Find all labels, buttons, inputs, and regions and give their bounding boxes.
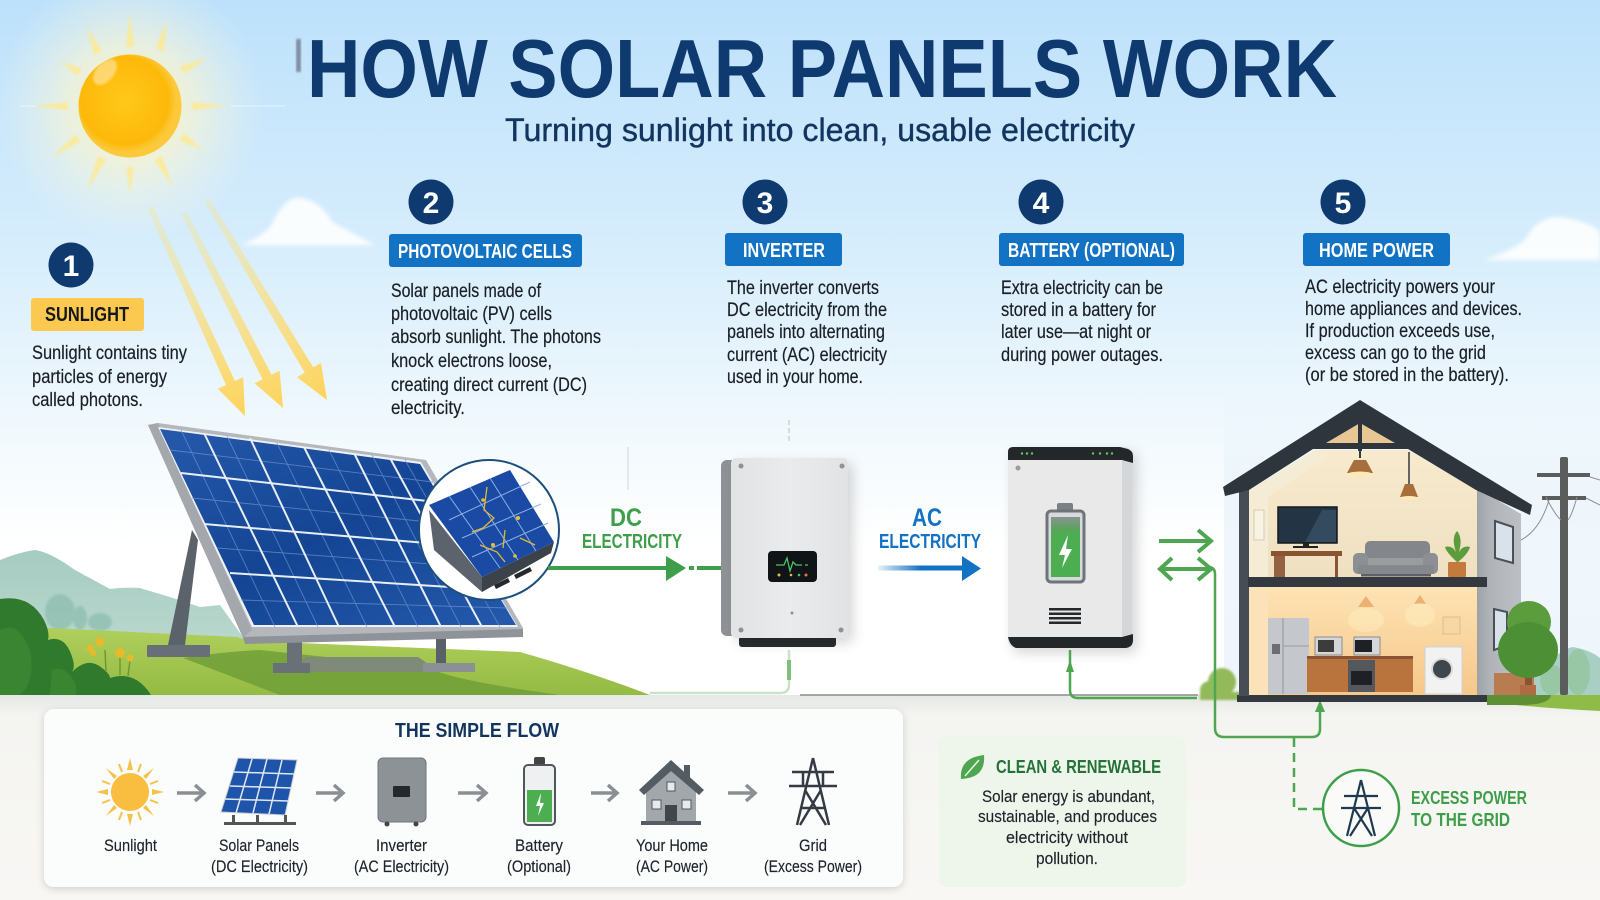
- step 2: photovoltaic cells: photovoltaic (PV) cells: [391, 304, 552, 325]
- TV: [1278, 507, 1337, 548]
- AC electricity label: ELECTRICITY: [879, 531, 982, 553]
- callout: clean and renewable: CLEAN & RENEWABLE: [996, 757, 1161, 777]
- step 3: inverter: The inverter converts: [727, 278, 879, 299]
- bush beside house: [1200, 668, 1240, 700]
- step 3: inverter: DC electricity from the: [727, 300, 887, 321]
- flow labels: (Optional): [507, 857, 571, 876]
- AC arrow: [878, 556, 981, 581]
- icon: grid tower: [1341, 780, 1381, 836]
- step 5: home power: home appliances and devices.: [1305, 299, 1522, 320]
- step 3: inverter: current (AC) electricity: [727, 345, 887, 366]
- flow arrow: [728, 785, 755, 801]
- flow labels: Solar Panels: [219, 836, 299, 855]
- step 1: sunlight: particles of energy: [32, 367, 167, 388]
- background sky: [0, 0, 1600, 700]
- step 2: photovoltaic cells: creating direct current (DC): [391, 375, 587, 396]
- panel: the simple flow: [44, 709, 903, 887]
- pendant lamps upper: [1347, 450, 1418, 500]
- step 5: home power: If production exceeds use,: [1305, 321, 1495, 342]
- AC electricity label: [879, 504, 982, 553]
- step 3: inverter: 3: [757, 187, 773, 220]
- step 2: photovoltaic cells: electricity.: [391, 398, 465, 419]
- magnified PV cell: [419, 460, 559, 600]
- ground line: [800, 694, 1198, 696]
- step 5: home power: AC electricity powers your: [1305, 277, 1496, 298]
- flow arrow: [177, 785, 204, 801]
- inverter unit: [628, 420, 848, 647]
- step 4: battery: during power outages.: [1001, 345, 1163, 366]
- step 4: battery: BATTERY (OPTIONAL): [1008, 240, 1175, 262]
- console table: [1271, 551, 1342, 577]
- flow labels: (AC Electricity): [354, 857, 449, 876]
- step 5: home power: excess can go to the grid: [1305, 343, 1486, 364]
- step 3: inverter: INVERTER: [743, 240, 825, 262]
- callout: clean and renewable: [939, 737, 1186, 887]
- DC electricity label: ELECTRICITY: [582, 531, 682, 553]
- flow labels: Inverter: [376, 836, 427, 855]
- flow icon: solar panel: [221, 758, 297, 825]
- flow labels: (Excess Power): [764, 857, 862, 876]
- step 2: photovoltaic cells: 2: [423, 187, 439, 220]
- flow labels: [104, 836, 862, 876]
- sunlight beams: [147, 198, 327, 416]
- sofa: [1353, 541, 1438, 576]
- background lower band: [0, 695, 1600, 900]
- background sky tint right: [1224, 380, 1600, 696]
- step 4: battery: later use—at night or: [1001, 322, 1152, 343]
- step 5: home power: HOME POWER: [1319, 240, 1434, 262]
- flow labels: (DC Electricity): [211, 857, 308, 876]
- step 3: inverter: used in your home.: [727, 367, 863, 388]
- battery unit: [1008, 447, 1133, 648]
- microwaves: [1315, 637, 1380, 655]
- callout: clean and renewable: Solar energy is abundant,: [982, 787, 1155, 806]
- step 2: photovoltaic cells: absorb sunlight. The photons: [391, 327, 601, 348]
- side windows: [1494, 521, 1513, 650]
- kitchen counter: [1307, 656, 1413, 692]
- tree: [1498, 601, 1558, 695]
- step 2: photovoltaic cells: knock electrons loose,: [391, 351, 552, 372]
- refrigerator: [1268, 618, 1309, 694]
- step 5: home power: [1303, 180, 1522, 386]
- solar panel array: [147, 423, 523, 673]
- step 4: battery: 4: [1033, 187, 1050, 220]
- title: HOW SOLAR PANELS WORK: [307, 22, 1337, 115]
- flow labels: Your Home: [636, 836, 708, 855]
- potted plant: [1445, 531, 1470, 577]
- clouds: [240, 198, 1600, 260]
- flow labels: (AC Power): [636, 857, 708, 876]
- washing machine: [1425, 647, 1462, 694]
- step 4: battery: stored in a battery for: [1001, 300, 1157, 321]
- wall picture: [1254, 510, 1264, 540]
- flow labels: Battery: [515, 836, 563, 855]
- panel: the simple flow: THE SIMPLE FLOW: [395, 720, 559, 742]
- step 1: sunlight: 1: [63, 250, 79, 283]
- step 1: sunlight: SUNLIGHT: [45, 304, 129, 326]
- flow arrow: [316, 785, 343, 801]
- wall panel: [1443, 617, 1460, 634]
- excess power to the grid: EXCESS POWER: [1411, 787, 1527, 808]
- callout: clean and renewable: pollution.: [1036, 849, 1098, 868]
- step 5: home power: 5: [1335, 187, 1351, 220]
- excess power to the grid: TO THE GRID: [1411, 809, 1510, 830]
- step 1: sunlight: called photons.: [32, 390, 143, 411]
- boxes: [1494, 673, 1534, 695]
- AC electricity label: AC: [912, 504, 942, 532]
- flow icon: transmission tower: [789, 758, 837, 825]
- callout: clean and renewable: electricity without: [1006, 828, 1128, 847]
- step 5: home power: (or be stored in the battery).: [1305, 365, 1509, 386]
- flow icon: house: [639, 760, 704, 825]
- step 2: photovoltaic cells: PHOTOVOLTAIC CELLS: [398, 241, 572, 263]
- DC electricity label: [582, 504, 682, 553]
- flow icon: sun: [96, 758, 164, 826]
- step 1: sunlight: [31, 242, 187, 411]
- step 1: sunlight: Sunlight contains tiny: [32, 343, 187, 364]
- landscape: hills and bushes: [0, 550, 650, 695]
- step 4: battery: [999, 180, 1184, 366]
- step 4: battery: Extra electricity can be: [1001, 278, 1163, 299]
- house: [1223, 400, 1558, 702]
- step 2: photovoltaic cells: Solar panels made of: [391, 281, 542, 302]
- ceiling lights lower: [1348, 595, 1435, 632]
- flow labels: Grid: [799, 836, 827, 855]
- DC arrow: [548, 556, 721, 581]
- sun: [0, 0, 285, 241]
- callout: clean and renewable: sustainable, and produces: [978, 807, 1157, 826]
- step 3: inverter: panels into alternating: [727, 322, 885, 343]
- green connection lines and arrows: [650, 530, 1325, 809]
- step 2: photovoltaic cells: [389, 180, 601, 419]
- flow labels: Sunlight: [104, 836, 157, 855]
- flow icon: battery: [524, 757, 555, 825]
- icon: leaf: [961, 755, 984, 779]
- flow arrow: [591, 785, 617, 801]
- step 3: inverter: [725, 180, 887, 388]
- DC electricity label: DC: [610, 504, 642, 532]
- subtitle: Turning sunlight into clean, usable electricity: [505, 112, 1135, 148]
- utility pole and right hills: [1487, 457, 1600, 711]
- flow icon: inverter: [378, 758, 426, 826]
- excess power to the grid: [1323, 770, 1527, 846]
- flow arrow: [458, 785, 486, 801]
